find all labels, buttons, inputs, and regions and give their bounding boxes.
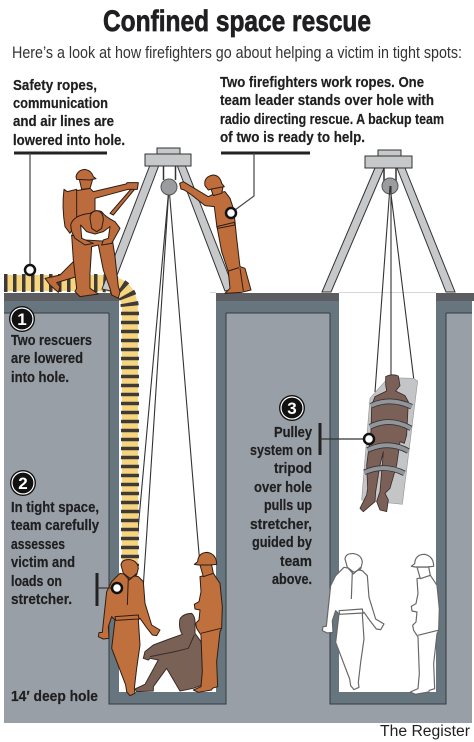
step 3: Pulley	[274, 424, 313, 441]
step 3: over hole	[254, 479, 312, 496]
step 2: 2	[18, 474, 28, 493]
ground cross-section	[4, 293, 474, 723]
rescuer at rope with victim harness	[45, 169, 138, 298]
hole depth label: 14′ deep hole	[11, 688, 98, 705]
step 3: stretcher,	[250, 516, 312, 533]
step 2: stretcher.	[11, 591, 72, 608]
seated victim	[135, 613, 203, 692]
callout: safety ropes	[13, 77, 125, 275]
step 3: tripod	[274, 460, 312, 477]
step 3: system on	[250, 442, 312, 459]
step 2: victim and	[11, 554, 75, 571]
step 1	[9, 306, 92, 386]
callout: safety ropes: lowered into hole.	[13, 132, 125, 149]
step 3: above.	[272, 571, 312, 588]
callout: safety ropes: and air lines are	[13, 113, 114, 130]
callout: two firefighters: team leader stands over hole with	[220, 92, 434, 109]
step 1: into hole.	[11, 369, 69, 386]
firefighter right in hole	[193, 552, 222, 692]
ghost firefighter left	[322, 554, 384, 690]
step 3: guided by	[252, 534, 313, 551]
step 1: are lowered	[11, 350, 83, 367]
stretcher with victim	[360, 186, 418, 512]
firefighter left in hole	[98, 560, 160, 696]
step 2	[10, 470, 122, 608]
air hose	[4, 283, 130, 566]
rescuer leaning on tripod	[180, 175, 251, 293]
tripod 1	[102, 148, 234, 291]
victim on stretcher	[360, 375, 408, 512]
stretcher board	[362, 378, 418, 504]
step 2: team carefully	[11, 517, 100, 534]
step 3: 3	[287, 399, 297, 418]
hole 2	[330, 293, 446, 704]
step 1: 1	[17, 310, 27, 329]
callout: safety ropes: Safety ropes,	[13, 77, 97, 94]
callout: two firefighters: of two is ready to help.	[220, 129, 365, 146]
callout: two firefighters	[220, 74, 444, 218]
credit: The Register	[380, 723, 470, 740]
ropes to stretcher	[375, 186, 414, 392]
step 2: In tight space,	[11, 499, 99, 516]
step 1: Two rescuers	[11, 332, 92, 349]
ropes in hole 1	[135, 187, 200, 590]
stretcher straps	[364, 401, 412, 473]
callout: two firefighters: Two firefighters work ropes. One	[220, 74, 424, 91]
step 2: loads on	[11, 573, 62, 590]
step 2: assesses	[11, 536, 65, 553]
callout: safety ropes: communication	[13, 95, 108, 112]
hole 1	[4, 293, 472, 704]
title: Confined space rescue	[103, 5, 371, 38]
step 3: pulls up	[264, 497, 312, 514]
tripod 2	[322, 150, 455, 292]
step 3	[250, 395, 374, 588]
step 3: team	[280, 553, 312, 570]
ghost firefighter right	[410, 554, 439, 694]
